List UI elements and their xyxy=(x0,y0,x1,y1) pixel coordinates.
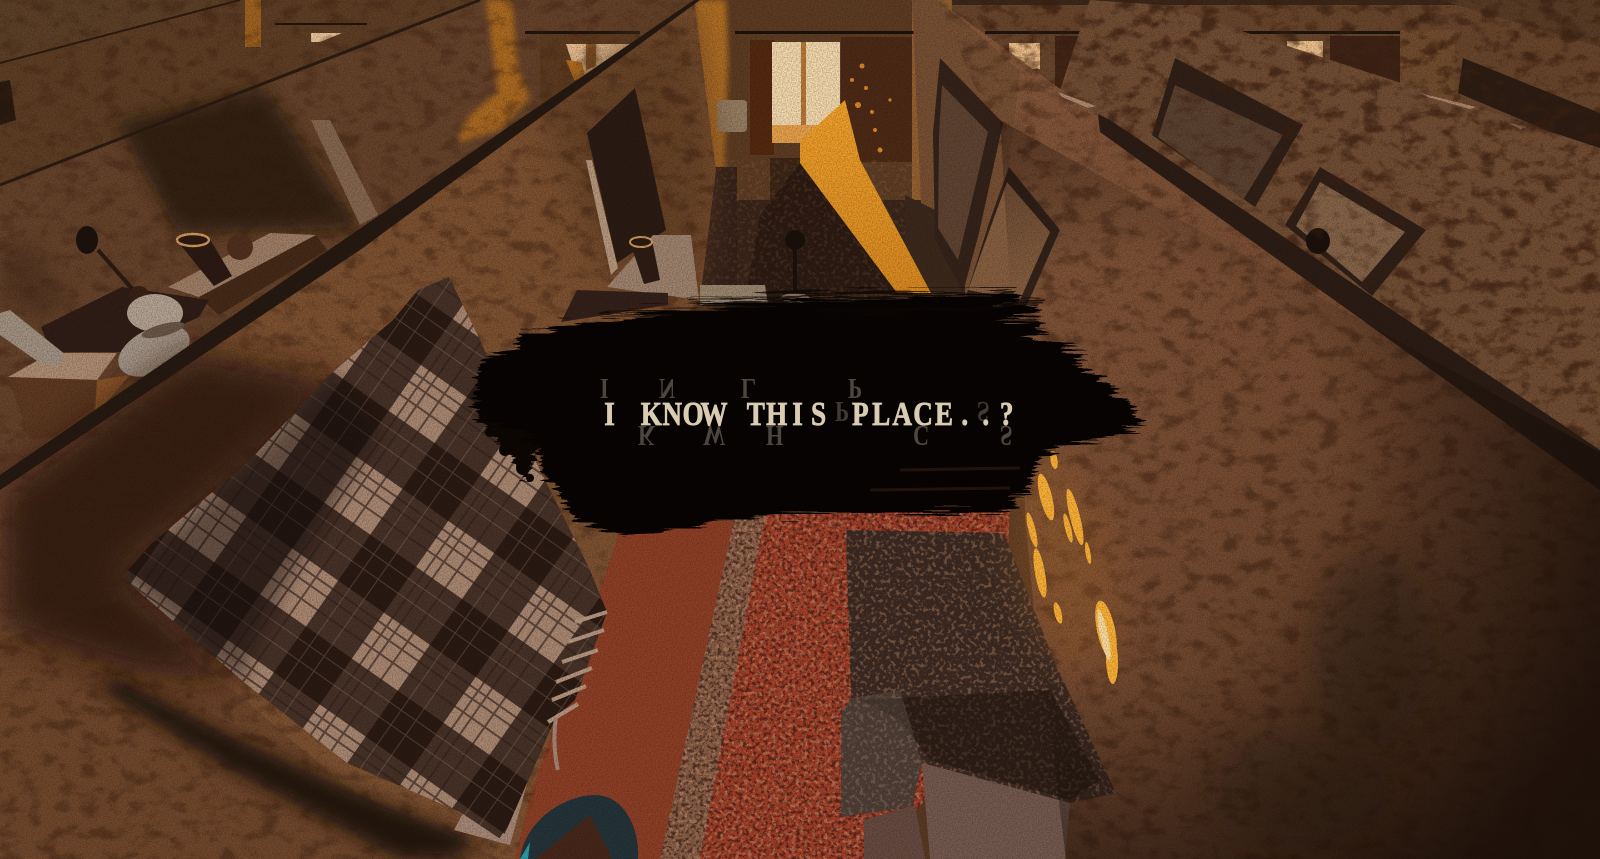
panel: far left mirrored rooms xyxy=(0,0,694,240)
panel: black ink brush stroke xyxy=(473,290,1143,538)
white slivers on right wall top edge xyxy=(1058,92,1113,130)
dark diagonal edge on right wall xyxy=(1098,114,1600,490)
left panel shelf objects xyxy=(0,226,327,440)
pillows xyxy=(864,763,1070,859)
sofa with patterned cover xyxy=(840,528,1120,820)
caption ghost letters, top row: P xyxy=(848,372,862,403)
caption ghost letters, bottom row xyxy=(638,419,1012,450)
far right mirrored rooms xyxy=(938,0,1600,500)
center room furniture and floor xyxy=(686,100,929,310)
sunlight glow on wall xyxy=(992,442,1138,678)
corridor right wall with painting and door xyxy=(905,0,1060,312)
caption ghost letters, top row: N xyxy=(659,372,675,403)
caption: I KNOW THIS PLACE..? xyxy=(604,395,1013,433)
icon: lamp with stem and shade xyxy=(76,226,198,387)
left mirror panel wall xyxy=(0,0,700,480)
caption ghost letters, bottom row: S xyxy=(1000,419,1012,450)
caption ghost letters, top row xyxy=(600,372,862,403)
light beam from window xyxy=(800,100,931,293)
plaid blanket xyxy=(122,277,607,845)
panel: foreground left wall xyxy=(0,0,720,859)
caption ghost letters, bottom row: H xyxy=(766,419,784,450)
sunlight splashes on wall xyxy=(1024,451,1121,684)
teal arch object at bottom xyxy=(520,795,638,859)
caption ghost letters, bottom row: W xyxy=(703,419,725,450)
caption ghost letters, middle row: S xyxy=(977,395,989,426)
center shelf and cabinet on left wall xyxy=(561,88,809,322)
icon: tall cylinder vase xyxy=(177,234,232,286)
caption ghost letters, bottom row: K xyxy=(638,419,656,450)
main right wall xyxy=(938,0,1600,859)
caption ghost letters, top row: L xyxy=(741,372,756,403)
wallpaper damask on right wall xyxy=(940,0,1600,859)
mirrored wall panel with painting and framed door xyxy=(983,0,1600,442)
right wall vignette and foliage shadow xyxy=(1000,120,1600,859)
caption ghost letters, middle row xyxy=(835,395,989,426)
panel: center room far wall xyxy=(694,0,952,300)
icon: bottle xyxy=(0,310,66,367)
caption ghost letters, bottom row: C xyxy=(913,419,929,450)
black diagonal edge on left wall xyxy=(0,0,700,490)
left foreground shadow stick xyxy=(97,680,480,859)
caption ghost letters, top row: I xyxy=(600,372,609,403)
caption ghost letters, middle row: P xyxy=(835,395,849,426)
floor and rug xyxy=(515,510,1020,859)
